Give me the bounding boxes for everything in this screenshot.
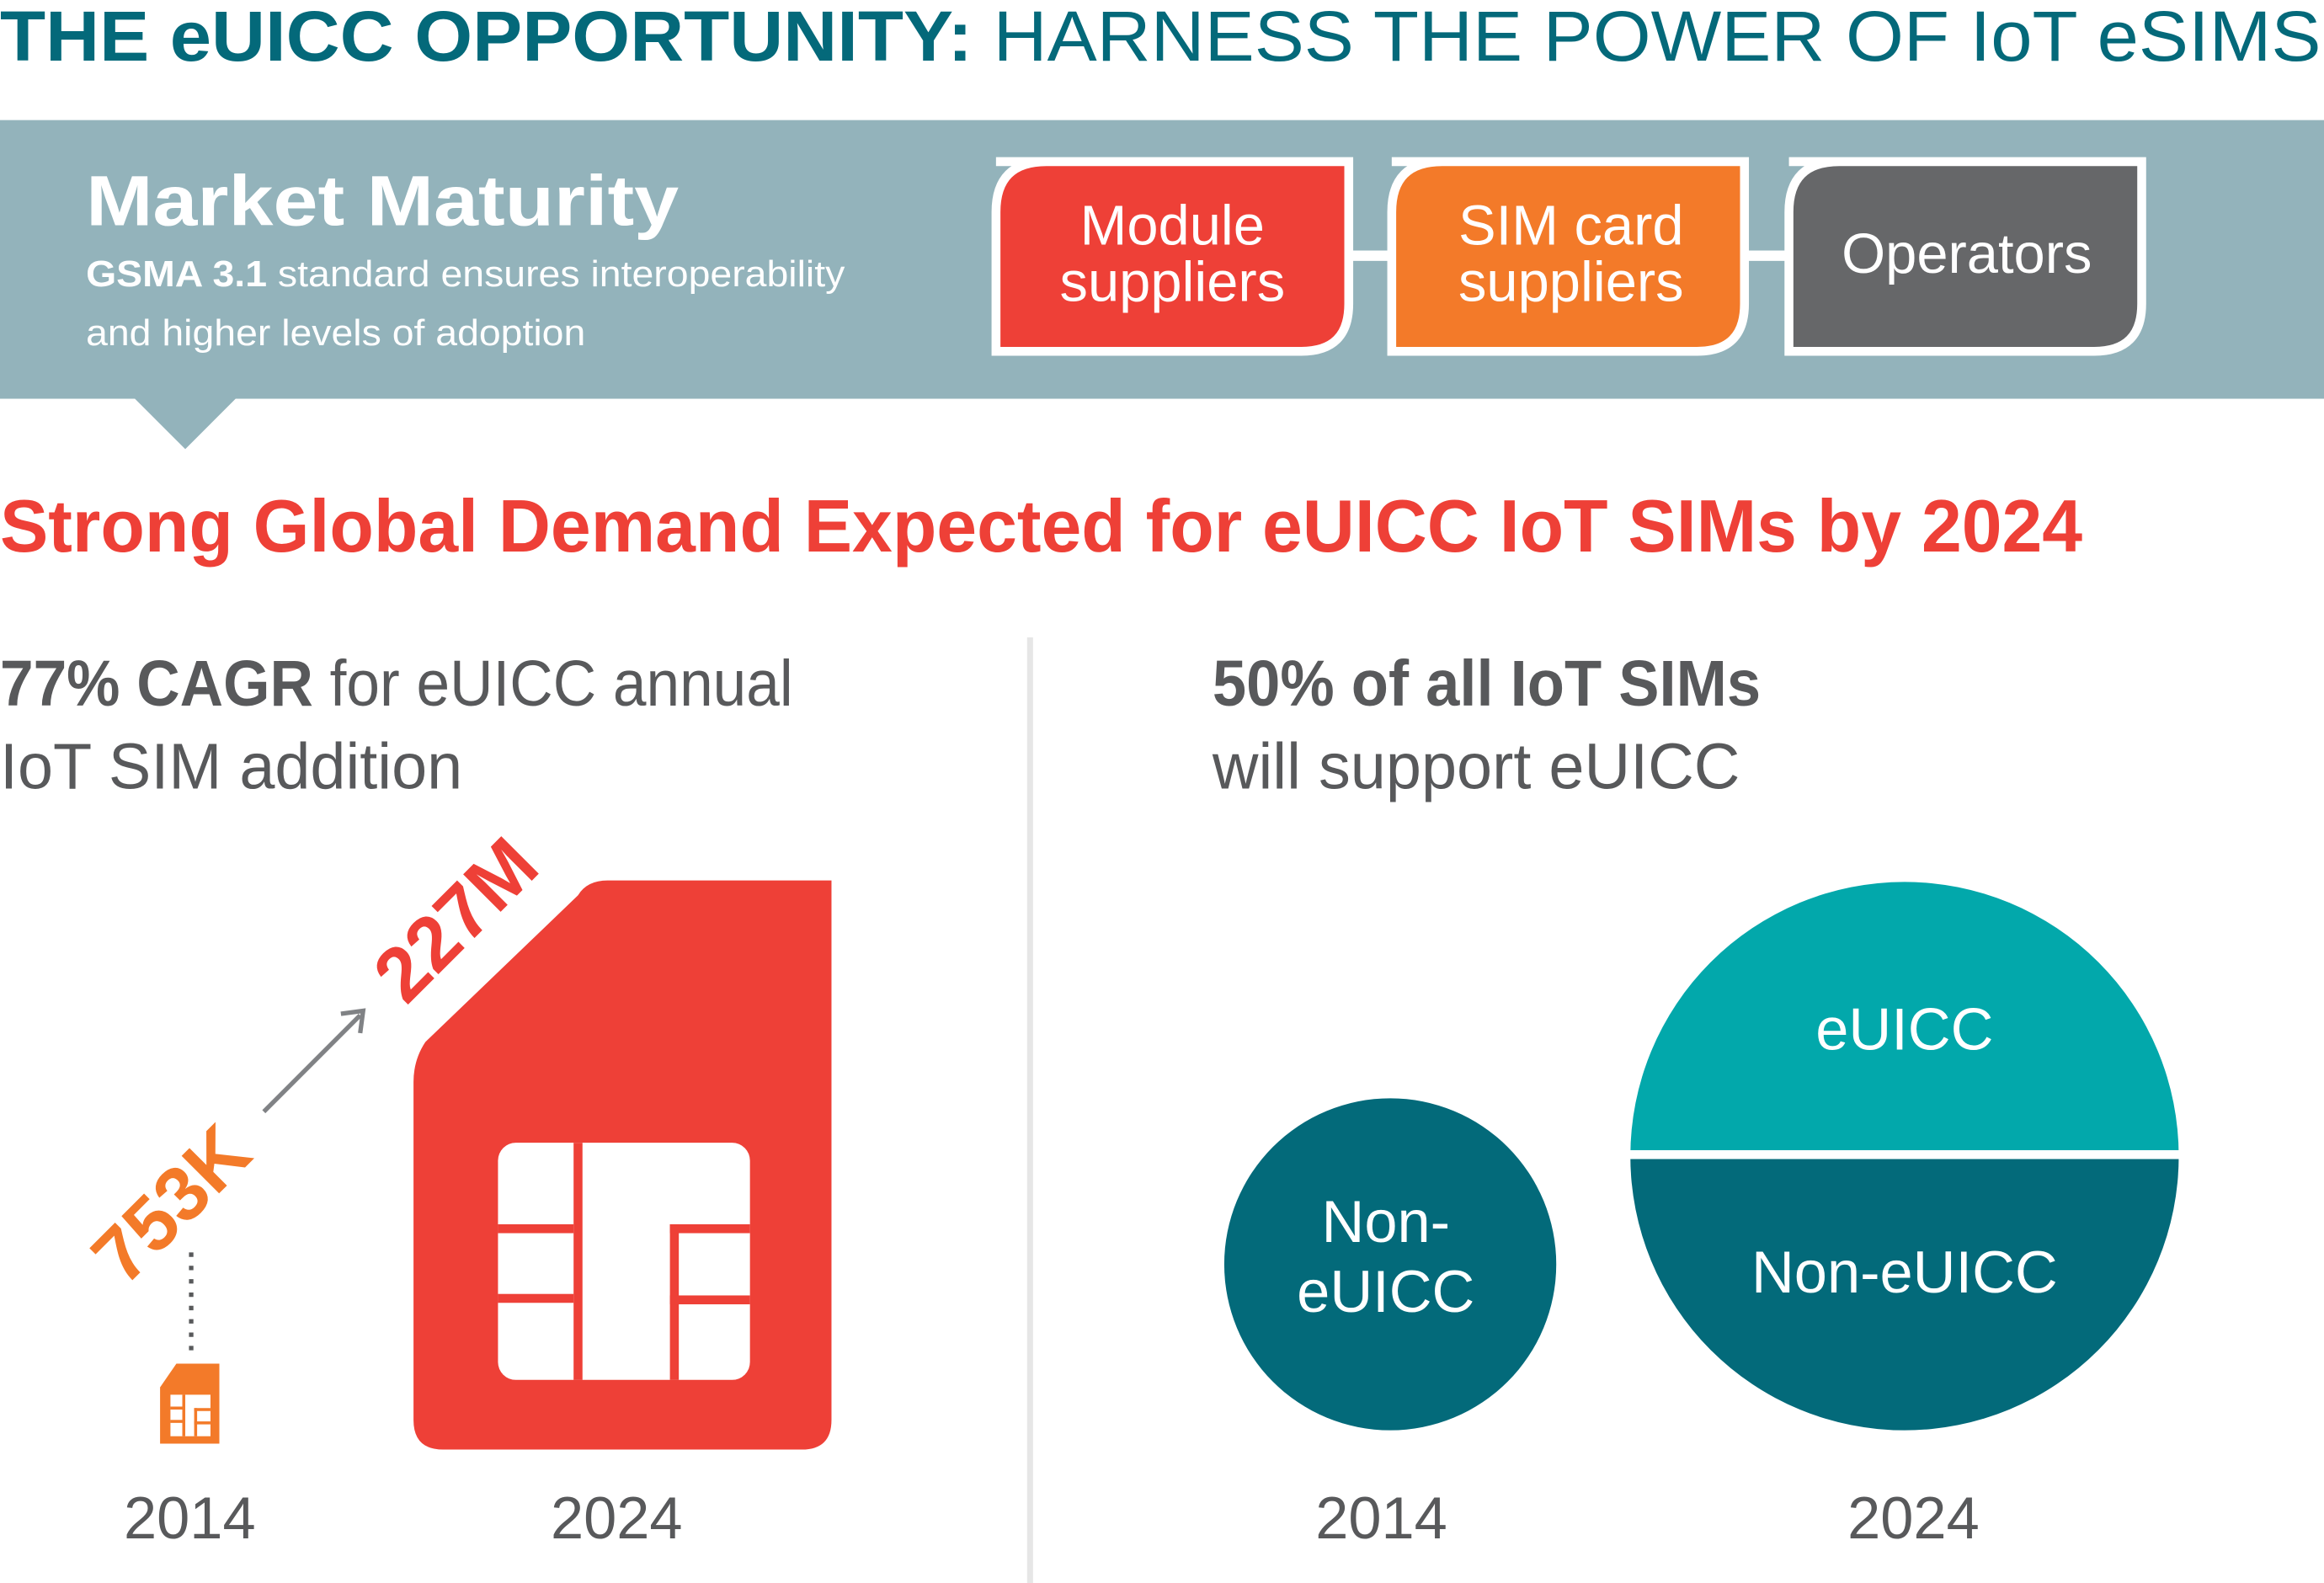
circle: 2014 xyxy=(1224,1098,1556,1431)
text: GSMA description xyxy=(86,253,845,354)
arrow xyxy=(264,1011,363,1111)
heading: strong global demand: Strong Global Demand Expected for eUICC IoT SIMs by 2024 xyxy=(0,484,2082,568)
years left: 2024 xyxy=(551,1484,683,1551)
years right: 2014 xyxy=(1315,1484,1447,1551)
label: 227M: 227M xyxy=(357,821,554,1018)
box: operators: Operators xyxy=(1842,222,2092,285)
chart: SIM size comparison xyxy=(76,821,831,1551)
years right xyxy=(1315,1484,1980,1551)
box: module suppliers: Module xyxy=(1080,194,1265,257)
text: 50% of all IoT SIMs: 50% of all IoT SIMs xyxy=(1213,648,1761,720)
box: SIM card suppliers: SIM card xyxy=(1458,194,1684,257)
box: module suppliers: suppliers xyxy=(1060,250,1285,313)
box: SIM card suppliers: suppliers xyxy=(1458,250,1684,313)
text: 50% of all IoT SIMs xyxy=(1212,648,1761,802)
circle: 2024 xyxy=(1628,882,2182,1431)
circle: 2014: eUICC xyxy=(1297,1258,1474,1324)
circle: 2024: eUICC xyxy=(1815,995,1993,1062)
text: GSMA description: GSMA 3.1 standard ensures interoperability xyxy=(86,253,845,295)
panel: market maturity band xyxy=(0,120,2324,449)
box: operators xyxy=(1789,162,2141,351)
circle: 2024: Non-eUICC xyxy=(1751,1239,2058,1305)
years left: 2014 xyxy=(124,1484,256,1551)
box: SIM card suppliers xyxy=(1392,162,1745,351)
years right: 2024 xyxy=(1847,1484,1980,1551)
text: 77% CAGR: IoT SIM addition xyxy=(0,730,462,802)
text: GSMA description: and higher levels of adoption xyxy=(86,312,585,354)
text: 77% CAGR: 77% CAGR for eUICC annual xyxy=(0,648,793,720)
circle: 2014: Non- xyxy=(1322,1188,1450,1255)
icon: small SIM 2014 xyxy=(160,1363,220,1443)
heading: market maturity: Market Maturity xyxy=(86,162,679,241)
icon: big SIM 2024 xyxy=(413,881,831,1450)
box: module suppliers xyxy=(996,162,1349,351)
label: 753K: 753K xyxy=(76,1109,267,1300)
chart: eUICC share circles xyxy=(1224,882,2182,1551)
text: 77% CAGR xyxy=(0,648,793,802)
connectors xyxy=(1341,251,1796,261)
text: 50% of all IoT SIMs: will support eUICC xyxy=(1212,730,1740,802)
years left xyxy=(124,1484,683,1551)
